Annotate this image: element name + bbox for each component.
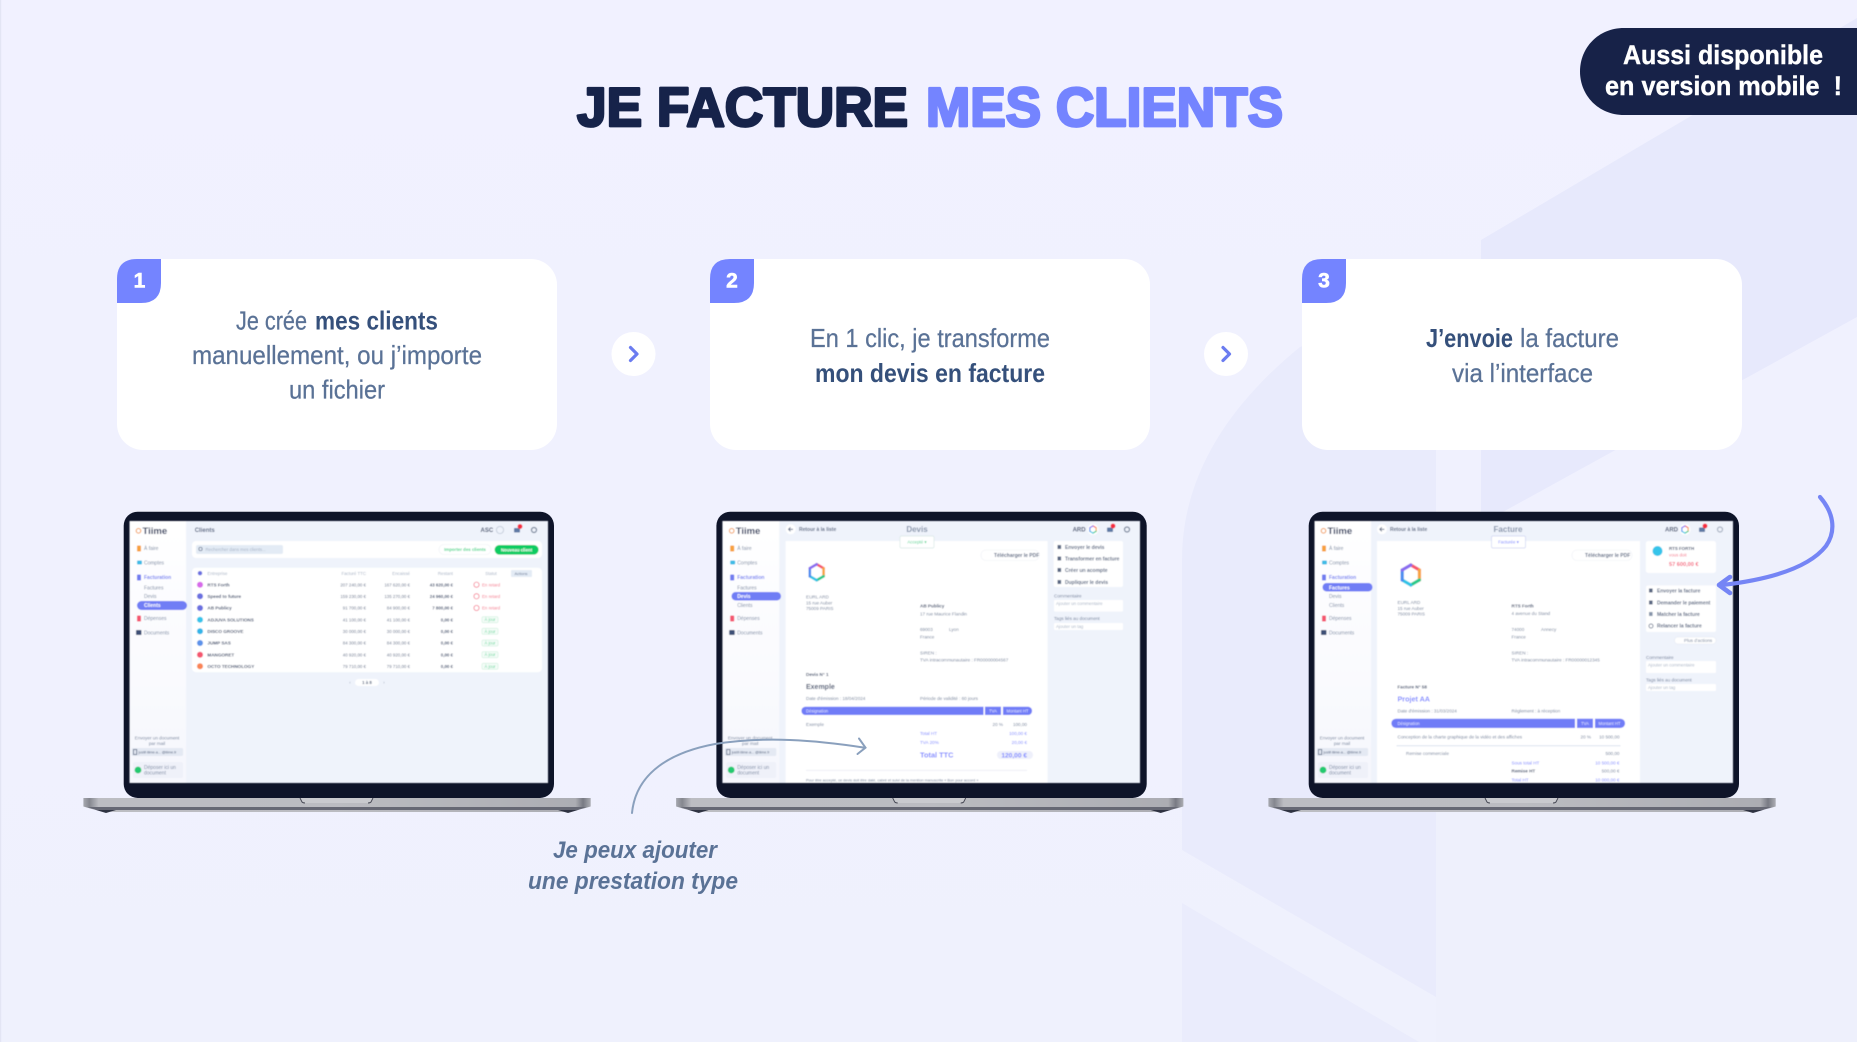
actions: Relancer la facture bbox=[1657, 624, 1702, 630]
screen: facture: ARD bbox=[1665, 528, 1679, 534]
table rows: À jour bbox=[485, 640, 496, 646]
screen: devis: Lyon bbox=[949, 627, 959, 632]
table header: Désignation bbox=[806, 708, 829, 714]
table rows: AB Publicy bbox=[207, 606, 232, 611]
arrow: step 1 to step 2 bbox=[612, 332, 656, 376]
screen: clients: Entreprise bbox=[207, 571, 228, 576]
screen: clients: › bbox=[383, 680, 385, 685]
screen: devis: Commentaire bbox=[1054, 594, 1082, 598]
screen: facture: Factures bbox=[1329, 585, 1350, 591]
table rows: RTS Forth bbox=[207, 582, 230, 587]
screen: devis: SIREN : bbox=[920, 650, 937, 656]
screen: devis: Total TTC bbox=[920, 750, 954, 760]
step badge 3: 3 bbox=[1318, 270, 1330, 292]
screen: clients: Importer des clients bbox=[444, 547, 486, 552]
table rows: 30 000,00 € bbox=[343, 629, 367, 634]
actions: Envoyer le devis bbox=[1065, 545, 1105, 551]
screen: clients: Encaissé bbox=[392, 571, 411, 576]
screen: clients: Clients bbox=[144, 603, 161, 609]
screen: facture: Conception de la charte graphique de la vidéo et des affiches bbox=[1398, 734, 1523, 739]
table header bbox=[801, 707, 1032, 715]
step 3 text: via l’interface bbox=[1452, 358, 1593, 388]
table rows: 0,00 € bbox=[441, 664, 454, 669]
table rows: À jour bbox=[485, 617, 496, 622]
screen: facture: SIREN : bbox=[1512, 650, 1528, 656]
table rows: À jour bbox=[485, 629, 496, 634]
screen: devis: 100,00 bbox=[1013, 722, 1027, 727]
screen: devis: EURL ARD bbox=[806, 594, 829, 600]
arrow: send invoice bbox=[1719, 497, 1832, 593]
title: JE FACTURE bbox=[577, 76, 908, 138]
company logo bbox=[810, 564, 824, 580]
table rows: 24 960,00 € bbox=[430, 594, 454, 599]
screen: devis: 100,00 € bbox=[1009, 731, 1027, 736]
table rows: DISCO GROOVE bbox=[207, 629, 243, 634]
screen: facture: Remise HT bbox=[1512, 769, 1535, 774]
step badge 1: 1 bbox=[134, 270, 146, 292]
client card: RTS FORTH bbox=[1669, 546, 1694, 551]
table rows: 40 920,00 € bbox=[387, 652, 411, 657]
screen: facture: 500,00 € bbox=[1602, 769, 1620, 774]
table rows: 0,00 € bbox=[441, 641, 454, 646]
actions: Envoyer la facture bbox=[1657, 588, 1701, 594]
screen: devis: Date d'émission : 18/04/2024 bbox=[806, 696, 866, 701]
screen: clients: ASC bbox=[480, 528, 494, 534]
screen: facture: Date d'émission : 31/03/2024 bbox=[1398, 708, 1457, 714]
screen: facture: France bbox=[1512, 634, 1526, 640]
table rows bbox=[197, 582, 501, 669]
screen: facture: Facture bbox=[1494, 525, 1523, 534]
step 1 text: manuellement, ou j’importe bbox=[192, 340, 482, 370]
actions bbox=[1054, 541, 1123, 587]
screen: clients: Nouveau client bbox=[501, 547, 533, 552]
screen: facture: Remise commerciale bbox=[1406, 751, 1449, 756]
table rows: 207 240,00 € bbox=[340, 582, 367, 587]
table rows: 0,00 € bbox=[441, 629, 454, 634]
screen: devis: Exemple bbox=[806, 684, 835, 691]
screen: clients: Statut bbox=[485, 571, 498, 576]
table rows: À jour bbox=[485, 664, 496, 669]
screen: facture: 20 % bbox=[1581, 734, 1591, 739]
step badge 2 bbox=[710, 259, 754, 303]
step 1 text bbox=[192, 306, 482, 404]
step 1 text: Je crée bbox=[236, 306, 307, 336]
screen: devis: France bbox=[920, 634, 935, 640]
client card: vous doit bbox=[1669, 552, 1687, 558]
screen: devis: Ajouter un commentaire bbox=[1056, 601, 1103, 606]
table rows: ADJUVA SOLUTIONS bbox=[207, 617, 254, 622]
table rows: À jour bbox=[485, 652, 496, 657]
screen: facture: Facturée ▾ bbox=[1498, 540, 1519, 545]
title: MES CLIENTS bbox=[926, 76, 1283, 138]
annotation text bbox=[528, 837, 738, 895]
screen: facture bbox=[1314, 521, 1733, 783]
table rows: 43 620,00 € bbox=[430, 582, 454, 587]
screen: devis: 15 rue Auber bbox=[806, 600, 833, 606]
table rows: OCTO TECHNOLOGY bbox=[207, 664, 254, 669]
screen: clients: ‹ bbox=[349, 680, 351, 685]
step badge 3 bbox=[1302, 259, 1346, 303]
table rows: En retard bbox=[482, 606, 501, 611]
table rows: En retard bbox=[482, 594, 501, 599]
table rows: MANGORET bbox=[207, 652, 234, 657]
screen: clients: Clients bbox=[195, 528, 215, 534]
table header: TVA bbox=[989, 708, 997, 714]
table header: TVA bbox=[1581, 721, 1589, 726]
arrow: annotation to quote bbox=[632, 738, 866, 813]
screen: devis: Période de validité : 60 jours bbox=[920, 696, 979, 701]
screen: facture: Télécharger le PDF bbox=[1585, 553, 1630, 559]
screen: devis: Pour être accepté, ce devis doit être daté, cabré et suivi de la mention manuscrite « Bon pour accord » bbox=[806, 778, 978, 782]
table rows: 41 100,00 € bbox=[387, 617, 411, 622]
screen: devis: TVA intracommunautaire : FR00000004567 bbox=[920, 658, 1009, 662]
screen: devis: Total HT bbox=[920, 731, 937, 736]
step 3 text bbox=[1426, 323, 1619, 388]
screen: devis: AB Publicy bbox=[920, 604, 945, 608]
screen: clients bbox=[130, 521, 548, 783]
screen: facture: 74000 bbox=[1512, 627, 1525, 632]
table rows: 135 270,00 € bbox=[384, 594, 411, 599]
table rows: 40 920,00 € bbox=[343, 652, 367, 657]
screen: clients: Rechercher dans mes clients... bbox=[206, 547, 266, 552]
client card: 57 600,00 € bbox=[1669, 562, 1699, 568]
screen: devis: ARD bbox=[1073, 528, 1086, 534]
screen: facture: Sous total HT bbox=[1512, 760, 1540, 766]
screen: clients: 1 à 8 bbox=[362, 680, 372, 685]
step badge 1 bbox=[117, 259, 161, 303]
table rows: 30 000,00 € bbox=[387, 629, 411, 634]
screen: facture: Projet AA bbox=[1398, 694, 1430, 704]
screen: facture: Commentaire bbox=[1646, 655, 1674, 660]
screen: devis: TVA 20% bbox=[920, 740, 939, 745]
screen: facture: Facture N° 58 bbox=[1398, 684, 1427, 690]
step 3 text: J’envoie bbox=[1426, 323, 1513, 353]
screen: devis: 20 % bbox=[993, 722, 1003, 727]
annotation text: une prestation type bbox=[528, 868, 738, 895]
client card bbox=[1646, 541, 1716, 573]
table rows: 79 710,00 € bbox=[387, 664, 411, 669]
table rows: 84 300,00 € bbox=[343, 641, 367, 646]
table rows: 91 700,00 € bbox=[343, 606, 367, 611]
laptop 3: invoice bbox=[1268, 512, 1776, 813]
step 2 text: mon devis en facture bbox=[815, 358, 1045, 388]
actions bbox=[1646, 586, 1716, 632]
table rows: Speed to future bbox=[207, 594, 242, 599]
screen: facture: Tags liés au document bbox=[1646, 678, 1692, 682]
callout: mobile version: Aussi disponible bbox=[1623, 40, 1823, 70]
step 1 text: un fichier bbox=[289, 374, 385, 404]
step 2 text: En 1 clic, je transforme bbox=[810, 323, 1050, 353]
arrow: step 2 to step 3 bbox=[1204, 332, 1248, 376]
screen: facture: 500,00 bbox=[1605, 751, 1620, 756]
table rows: 79 710,00 € bbox=[343, 664, 367, 669]
panel: step 2 bbox=[710, 259, 1150, 450]
panel: step 1 bbox=[117, 259, 557, 450]
screen: devis: Retour à la liste bbox=[799, 527, 836, 533]
step badge 2: 2 bbox=[726, 270, 738, 292]
screen: facture: 10 000,00 € bbox=[1595, 778, 1620, 782]
screen: devis: Devis N° 1 bbox=[806, 672, 829, 677]
screen: clients: Restant bbox=[438, 571, 454, 576]
table rows: 7 800,00 € bbox=[432, 606, 454, 611]
screen: devis: 20,00 € bbox=[1012, 740, 1027, 745]
screen: devis: 120,00 € bbox=[1001, 752, 1027, 760]
screen: facture: Ajouter un commentaire bbox=[1648, 662, 1695, 667]
screen: devis: 75009 PARIS bbox=[806, 606, 834, 611]
actions: Dupliquer le devis bbox=[1065, 580, 1108, 586]
screen: devis: Télécharger le PDF bbox=[994, 553, 1039, 559]
screen: devis: 17 rue Maurice Flandin bbox=[920, 612, 967, 616]
table header: Désignation bbox=[1398, 721, 1420, 726]
laptop 1: clients list bbox=[83, 512, 591, 813]
panel: step 3 bbox=[1302, 259, 1742, 450]
table rows: 159 230,00 € bbox=[340, 594, 367, 599]
screen: facture: Total HT bbox=[1512, 778, 1529, 782]
screen: facture: RTS Forth bbox=[1512, 604, 1534, 608]
table rows: 0,00 € bbox=[441, 652, 454, 657]
company logo bbox=[1402, 565, 1419, 585]
table header: Montant HT bbox=[1599, 721, 1621, 726]
step 2 text bbox=[810, 323, 1050, 388]
screen: facture: EURL ARD bbox=[1398, 600, 1421, 605]
screen: facture: Plus d'actions bbox=[1684, 638, 1713, 643]
screen: facture: Règlement : à réception bbox=[1512, 708, 1561, 714]
table rows: 84 900,00 € bbox=[387, 606, 411, 611]
table header bbox=[1391, 719, 1625, 728]
table rows: En retard bbox=[482, 582, 501, 587]
screen: devis: Devis bbox=[906, 525, 928, 534]
table rows: JUMP SAS bbox=[207, 641, 231, 646]
table rows: 0,00 € bbox=[441, 617, 454, 622]
annotation text: Je peux ajouter bbox=[553, 837, 719, 864]
screen: facture: Retour à la liste bbox=[1390, 527, 1427, 533]
screen: facture: Annecy bbox=[1541, 627, 1557, 632]
screen: devis: Ajouter un tag bbox=[1056, 624, 1084, 629]
actions: Matcher la facture bbox=[1657, 612, 1700, 618]
table rows: 84 300,00 € bbox=[387, 641, 411, 646]
screen: facture: 15 rue Auber bbox=[1398, 606, 1424, 611]
screen: clients: Actions bbox=[514, 571, 528, 576]
step 1 text: mes clients bbox=[315, 306, 438, 336]
actions: Demander le paiement bbox=[1657, 600, 1711, 606]
screen: devis: Accepté ▾ bbox=[907, 540, 927, 545]
screen: facture: Ajouter un tag bbox=[1648, 685, 1676, 690]
screen: facture: TVA intracommunautaire : FR00000012345 bbox=[1512, 658, 1600, 662]
callout: mobile version bbox=[1580, 28, 1857, 115]
screen: facture: 10 500,00 bbox=[1599, 734, 1620, 739]
actions: Créer un acompte bbox=[1065, 568, 1108, 574]
laptop 2: quote bbox=[676, 512, 1183, 813]
screen: facture: 4 avenue du Stand bbox=[1512, 611, 1551, 616]
screen: devis: 69003 bbox=[920, 627, 933, 632]
table rows: 167 620,00 € bbox=[384, 582, 411, 587]
actions: Transformer en facture bbox=[1065, 557, 1120, 563]
screen: devis: Tags liés au document bbox=[1054, 616, 1100, 621]
table rows: 41 100,00 € bbox=[343, 617, 367, 622]
screen: devis: Exemple bbox=[806, 722, 824, 727]
screen: devis bbox=[722, 521, 1140, 783]
callout: mobile version: en version mobile ! bbox=[1605, 71, 1842, 101]
screen: clients: Facturé TTC bbox=[341, 571, 366, 576]
screen: facture: 10 500,00 € bbox=[1595, 760, 1620, 766]
table header: Montant HT bbox=[1007, 708, 1029, 714]
screen: facture: 75009 PARIS bbox=[1398, 612, 1425, 616]
step 3 text: la facture bbox=[1520, 323, 1619, 353]
screen: devis: Devis bbox=[737, 594, 751, 600]
